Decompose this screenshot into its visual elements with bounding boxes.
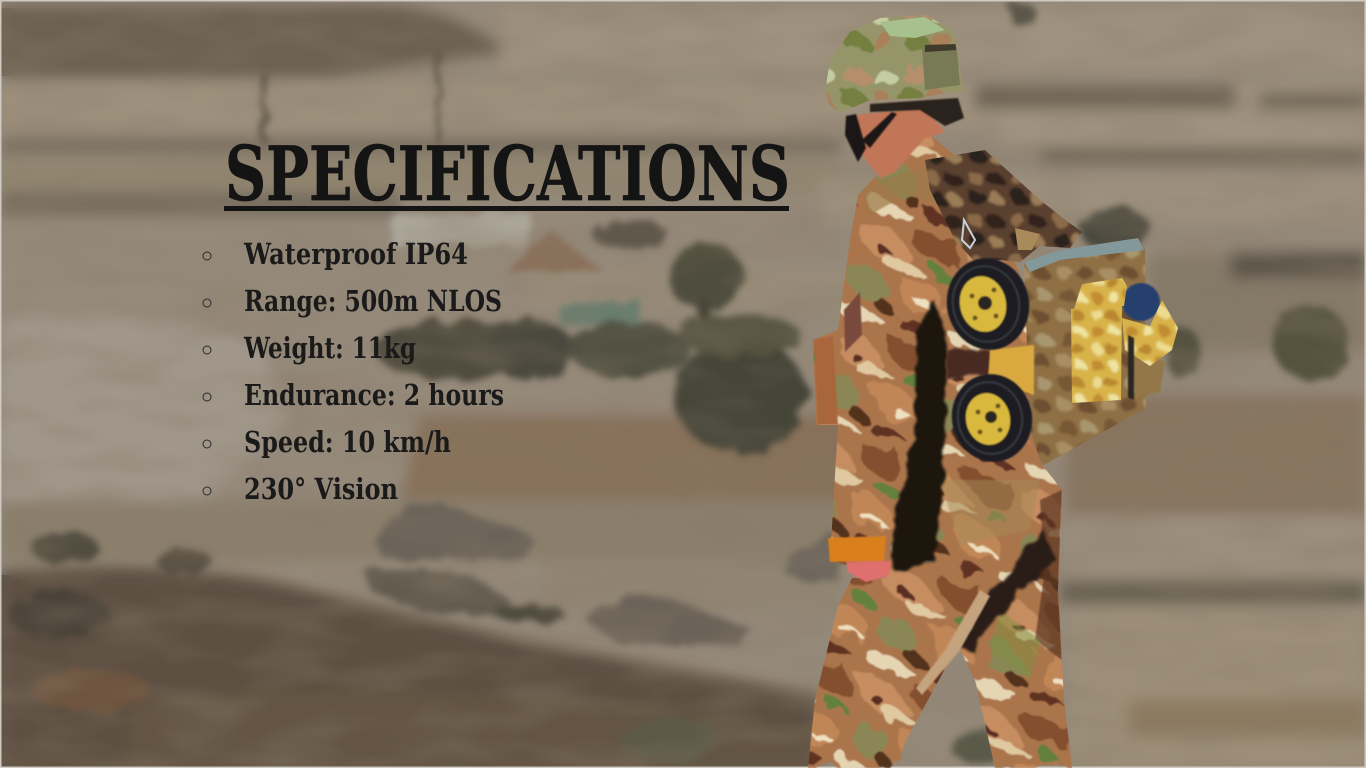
harness belly shadow	[945, 350, 990, 378]
yellow strip between wheels	[988, 345, 1034, 395]
list item: weight: Weight: 11kg	[243, 331, 416, 365]
crotch shadow	[957, 530, 1056, 652]
sensor dome	[1122, 283, 1160, 321]
leg highlight	[916, 590, 990, 695]
shoulder harness	[925, 150, 1082, 262]
shoulder patch	[844, 292, 862, 352]
panel strap	[1128, 335, 1134, 400]
list item: endurance: Endurance: 2 hours	[244, 378, 504, 412]
soldier with backpack robot	[800, 10, 1185, 768]
wheel: lower	[944, 367, 1040, 469]
neck and face	[856, 108, 945, 178]
arm pouch	[814, 336, 838, 425]
specifications list	[203, 237, 504, 506]
wheel: upper	[938, 250, 1038, 358]
list item: speed: Speed: 10 km/h	[244, 425, 451, 459]
hair and chin strap	[845, 98, 964, 162]
list item: vision: 230° Vision	[244, 472, 398, 506]
list item: vision	[203, 472, 398, 506]
soldier body in camouflage	[808, 136, 1072, 768]
torso shadow	[893, 300, 946, 572]
cuff and hand	[828, 536, 892, 582]
side lower flap	[1130, 345, 1165, 398]
list item: range: Range: 500m NLOS	[244, 284, 502, 318]
backpack box	[1024, 238, 1146, 466]
helmet	[825, 15, 964, 113]
list item: waterproof: Waterproof IP64	[243, 237, 468, 271]
yellow cover side	[1122, 300, 1178, 366]
yellow panel and flap	[1071, 278, 1127, 403]
heading: SPECIFICATIONS	[225, 130, 790, 218]
list item: weight	[203, 331, 416, 365]
